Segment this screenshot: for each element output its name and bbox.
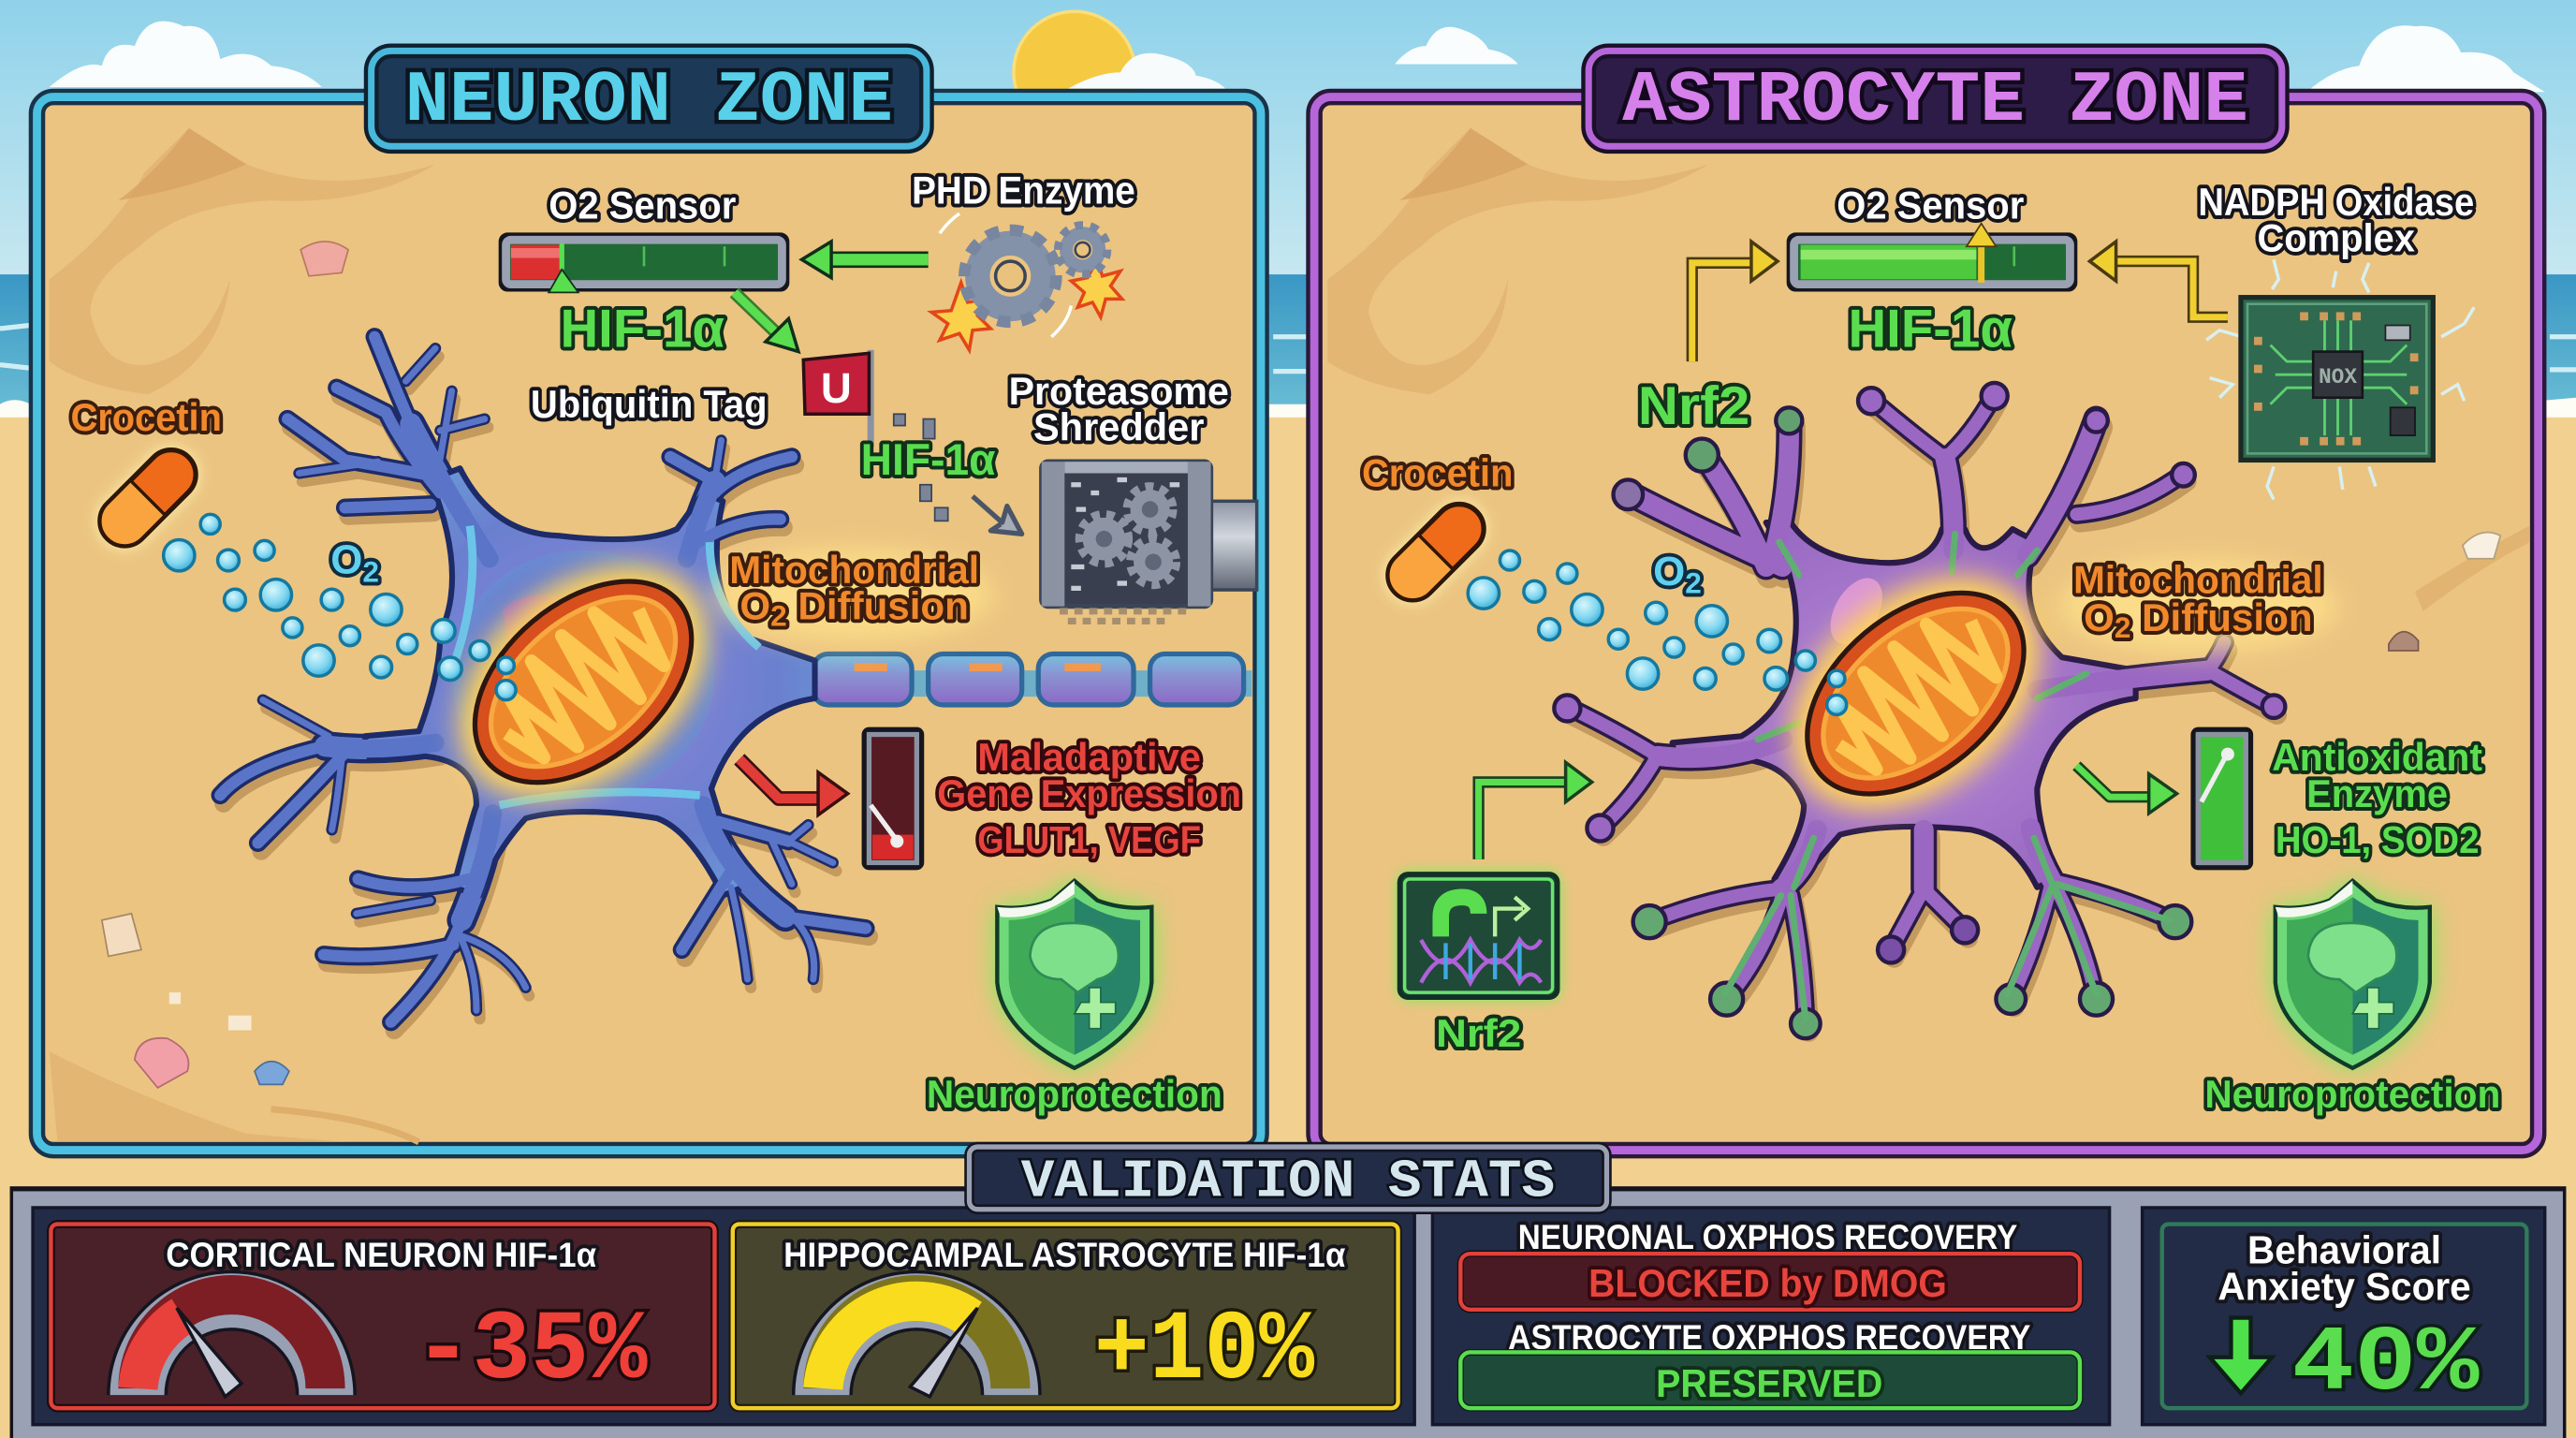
HIF-1a degraded label: HIF-1α	[861, 435, 996, 485]
dendrites shadow	[224, 345, 869, 1030]
arrow: to antioxidant	[2076, 766, 2177, 814]
mitochondrial label	[2058, 558, 2338, 653]
maladaptive text: Gene Expression	[937, 771, 1241, 815]
processes outline	[1567, 394, 2274, 1023]
neuron cell	[220, 337, 1251, 1030]
soma	[365, 468, 815, 896]
antioxidant text: Enzyme	[2306, 771, 2448, 815]
stat: OXPHOS recovery: NEURONAL OXPHOS RECOVERY	[1518, 1218, 2017, 1256]
title: NEURON ZONE: NEURON ZONE	[405, 61, 893, 142]
stats frame	[10, 1186, 2566, 1438]
gauge: antioxidant	[2193, 729, 2250, 868]
O2 label: 2	[1685, 566, 1702, 600]
panel: neuron zone	[37, 51, 1261, 1151]
mitochondrial label: O	[2084, 595, 2115, 639]
bar: blocked: BLOCKED by DMOG	[1588, 1261, 1947, 1305]
stat card: behavioral anxiety: Anxiety Score	[2217, 1264, 2471, 1308]
value: +10%: +10%	[1094, 1295, 1315, 1407]
value: 40%: 40%	[2291, 1312, 2481, 1416]
crocetin label: Crocetin	[1362, 451, 1513, 495]
mitochondrion	[1746, 530, 2086, 858]
neuroprotection label: Neuroprotection	[2204, 1072, 2500, 1116]
oxygen bubbles	[164, 514, 516, 700]
neuroprotection label: Neuroprotection	[927, 1072, 1222, 1116]
icon: proteasome shredder	[1042, 462, 1257, 621]
cloud middle	[1395, 27, 1518, 64]
cloud left	[50, 22, 322, 87]
cloud by sun	[1068, 53, 1225, 89]
stat card: behavioral anxiety	[2162, 1225, 2526, 1416]
sand dunes decoration	[1327, 128, 2530, 611]
HIF fragments	[894, 414, 948, 521]
arrow: NOX to sensor	[2089, 242, 2228, 317]
stat: OXPHOS recovery: ASTROCYTE OXPHOS RECOVERY	[1508, 1318, 2030, 1357]
antioxidant text: HO-1, SOD2	[2276, 818, 2479, 861]
icon: neuroprotection shield	[2276, 881, 2430, 1068]
mitochondrial label	[714, 548, 994, 640]
mitochondrial label: Diffusion	[787, 584, 969, 628]
arrow: sensor to tag	[735, 292, 798, 352]
cloud right	[2306, 25, 2545, 92]
gauge: -35%	[138, 1295, 326, 1397]
sand dunes decoration	[50, 128, 435, 1142]
O2 label: 2	[362, 554, 379, 588]
stat card: hippocampal astrocyte	[733, 1225, 1398, 1408]
value: -35%: -35%	[414, 1295, 648, 1407]
mitochondrial label: Mitochondrial	[2073, 558, 2323, 602]
icon: ubiquitin flag: U	[821, 364, 852, 412]
panel: astrocyte zone	[1314, 51, 2539, 1151]
axon segments	[805, 654, 1251, 705]
panel frame: astrocyte	[1314, 97, 2539, 1151]
Nrf2 box label: Nrf2	[1436, 1011, 1521, 1055]
Nrf2 label: Nrf2	[1638, 376, 1749, 436]
shells	[102, 242, 348, 1088]
shells	[2389, 533, 2500, 651]
stat card: hippocampal astrocyte: HIPPOCAMPAL ASTROCYTE HIF-1α	[783, 1236, 1346, 1274]
panel: validation stats	[10, 1147, 2566, 1438]
maladaptive text: GLUT1, VEGF	[977, 818, 1201, 861]
proteasome label: Shredder	[1033, 404, 1204, 448]
mitochondrion	[414, 518, 753, 845]
astrocyte cell	[1554, 383, 2285, 1038]
proteasome label	[1009, 369, 1229, 448]
icon: crocetin pill	[82, 433, 212, 563]
NADPH label	[2198, 180, 2474, 260]
ubiquitin tag label: Ubiquitin Tag	[531, 382, 768, 426]
bar: preserved: PRESERVED	[1656, 1361, 1882, 1405]
maladaptive text: Maladaptive	[977, 735, 1201, 779]
O2 sensor bar: high	[1789, 224, 2075, 289]
dendrite trunks fill	[326, 424, 785, 920]
process tips	[1554, 383, 2285, 1038]
icon: neuroprotection shield	[997, 881, 1151, 1068]
O2 label: O	[330, 537, 362, 583]
icon: Nrf2 DNA box	[1398, 873, 1559, 999]
antioxidant text	[2272, 735, 2482, 861]
mitochondrial label: O	[739, 584, 770, 628]
processes shadow	[1571, 403, 2277, 1032]
soma	[1673, 522, 2136, 890]
maladaptive text	[937, 735, 1241, 861]
PHD enzyme label: PHD Enzyme	[912, 169, 1135, 213]
mitochondrial label: Diffusion	[2130, 595, 2313, 639]
title: ASTROCYTE ZONE: ASTROCYTE ZONE	[1622, 61, 2248, 142]
bar: blocked	[1460, 1254, 2080, 1310]
soma inner fill	[452, 550, 714, 797]
O2 label: O	[1653, 549, 1685, 594]
arrow: PHD to sensor	[801, 242, 929, 278]
stats title plaque: VALIDATION STATS	[1021, 1152, 1555, 1213]
nucleus	[503, 594, 575, 674]
dendrites fill	[220, 337, 866, 1022]
stat card: behavioral anxiety: Behavioral	[2247, 1228, 2441, 1272]
arrow: Nrf2 to sensor	[1692, 242, 1778, 361]
soma light edge	[453, 526, 759, 805]
panel frame: neuron	[37, 97, 1261, 1151]
icon: crocetin pill	[1370, 487, 1500, 617]
icon: PHD gears	[931, 213, 1122, 350]
mitochondrial label: 2	[2115, 610, 2130, 644]
NADPH label: NADPH Oxidase	[2198, 180, 2474, 224]
sun	[1014, 11, 1135, 133]
highlight	[1820, 569, 1893, 653]
crocetin label: Crocetin	[70, 395, 222, 439]
mitochondrial label: 2	[770, 599, 787, 633]
O2 sensor label: O2 Sensor	[549, 183, 736, 227]
arrow: to gene expression	[739, 759, 848, 815]
proteasome label: Proteasome	[1009, 369, 1229, 413]
green streaks	[1725, 534, 2169, 1019]
processes fill	[1567, 394, 2274, 1023]
icon: NOX chip: NOX	[2319, 365, 2357, 389]
icon: down arrow	[2210, 1318, 2272, 1393]
dendrites outline	[220, 337, 866, 1022]
icon: ubiquitin flag	[803, 350, 871, 447]
bar: preserved	[1460, 1352, 2080, 1408]
arrow: Nrf2 box to cell	[1479, 762, 1592, 859]
oxygen bubbles	[1468, 550, 1847, 714]
stat: OXPHOS recovery	[1460, 1218, 2080, 1408]
O2 sensor label: O2 Sensor	[1837, 183, 2024, 227]
HIF-1a label: HIF-1α	[560, 299, 724, 359]
arrow: fragments to shredder	[973, 496, 1022, 534]
HIF-1a label: HIF-1α	[1848, 299, 2012, 359]
O2 sensor bar: low	[501, 235, 787, 292]
stat card: cortical neuron: CORTICAL NEURON HIF-1α	[166, 1236, 596, 1274]
NADPH label: Complex	[2258, 216, 2416, 260]
gauge: maladaptive	[864, 729, 922, 868]
mitochondrial label: Mitochondrial	[729, 548, 979, 592]
stat card: cortical neuron	[51, 1225, 714, 1408]
gauge: +10%	[822, 1295, 1011, 1397]
antioxidant text: Antioxidant	[2272, 735, 2482, 779]
icon: NOX chip	[2206, 259, 2474, 500]
